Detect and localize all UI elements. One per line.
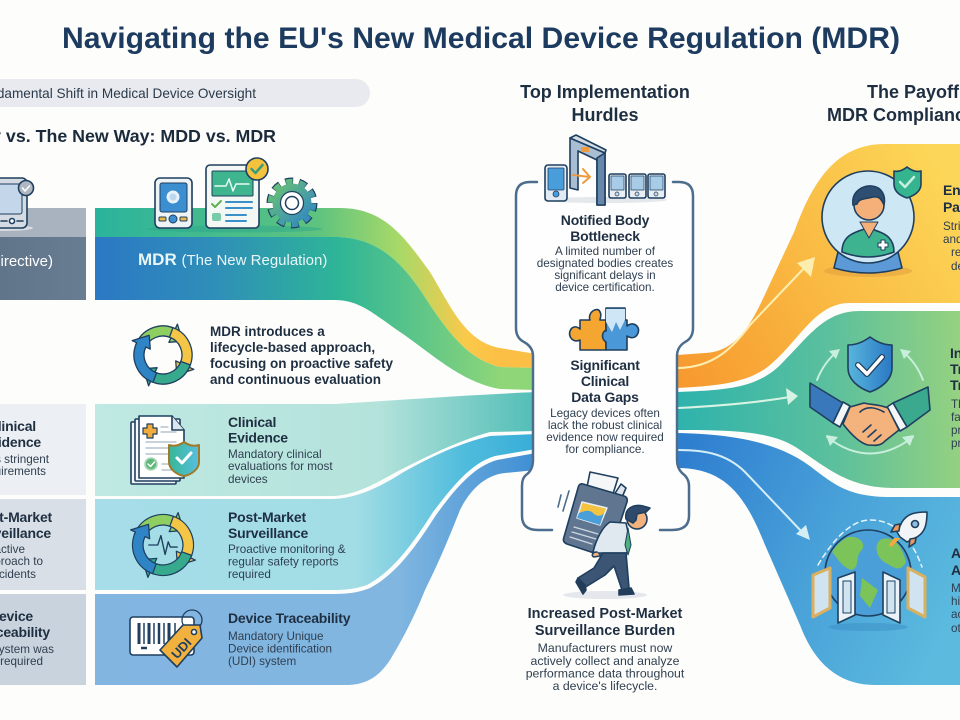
panel: MDR post-market bbox=[95, 434, 536, 590]
panel: MDR post-market: regular safety reports bbox=[228, 556, 339, 568]
icon: MDR gear bbox=[271, 182, 313, 224]
icon: MDR device bbox=[147, 178, 323, 232]
title: Navigating the EU's New Medical Device Regulation (MDR) bbox=[62, 22, 900, 55]
panel: MDR clinical evidence: Mandatory clinical bbox=[228, 448, 322, 461]
text: lifecycle approach bbox=[210, 324, 394, 387]
text: post-market burden: Manufacturers must now bbox=[538, 641, 672, 655]
text: notified body bottleneck: Bottleneck bbox=[570, 228, 640, 244]
section banner: fundamental shift bbox=[0, 79, 370, 107]
panel: MDD clinical evidence bbox=[0, 404, 86, 495]
panel: MDR traceability: Device identification bbox=[228, 642, 332, 656]
text: accelerated market access bbox=[951, 545, 960, 635]
panel: MDR clinical evidence: evaluations for most bbox=[228, 460, 333, 473]
heading: top implementation hurdles bbox=[520, 82, 690, 125]
panel: MDR traceability bbox=[95, 453, 536, 685]
text: post-market burden: a device's lifecycle. bbox=[553, 679, 657, 693]
panel: MDR traceability: Mandatory Unique bbox=[228, 630, 324, 643]
panel: MDR clinical evidence: devices bbox=[228, 473, 268, 486]
text: clinical data gaps: evidence now required bbox=[546, 431, 664, 444]
flow band: MDR header lower strip bbox=[95, 237, 536, 390]
panel: MDD post-market bbox=[0, 499, 86, 590]
panel: MDR clinical evidence: Evidence bbox=[228, 430, 288, 446]
text: clinical data gaps: Data Gaps bbox=[571, 389, 639, 405]
heading: top implementation hurdles: Top Implementation bbox=[520, 82, 690, 102]
text: notified body bottleneck: significant delays in bbox=[554, 269, 656, 282]
panel: MDD traceability: required bbox=[0, 655, 43, 668]
flow band: MDR upper strip to hurdles bbox=[95, 208, 536, 368]
flow band: blue to market access bbox=[677, 433, 960, 685]
text: lifecycle approach: MDR introduces a bbox=[210, 324, 325, 339]
arrow: to transparency bbox=[678, 388, 798, 408]
panel: MDR post-market: Post-Market bbox=[228, 509, 306, 525]
panel: hurdles card bbox=[516, 182, 693, 530]
text: clinical data gaps: Clinical bbox=[581, 373, 629, 389]
flow band: orange to patient safety bbox=[677, 144, 960, 388]
text: lifecycle approach: focusing on proactive safety bbox=[210, 356, 394, 371]
text: notified body bottleneck: A limited number of bbox=[555, 245, 656, 258]
panel: MDD header bbox=[0, 208, 86, 300]
panel: MDD traceability bbox=[0, 594, 86, 685]
icon: clinical document bbox=[131, 416, 199, 484]
flow band: green to transparency bbox=[677, 311, 960, 488]
heading: top implementation hurdles: Hurdles bbox=[571, 105, 639, 125]
text: clinical data gaps bbox=[546, 357, 664, 456]
panel: MDR traceability: (UDI) system bbox=[228, 655, 296, 668]
icon: patient in protective globe bbox=[822, 167, 921, 277]
text: increased transparency and trust bbox=[950, 345, 960, 450]
icon: notified body gate bbox=[543, 135, 667, 205]
text: notified body bottleneck: designated bodies creates bbox=[537, 257, 673, 270]
icon: UDI barcode tag: UDI bbox=[168, 635, 194, 662]
arrow: to patient safety bbox=[677, 257, 815, 368]
panel: MDR clinical evidence: Clinical bbox=[228, 414, 276, 430]
text: notified body bottleneck bbox=[537, 212, 673, 294]
heading: the payoff bbox=[827, 82, 960, 125]
text: post-market burden: Increased Post-Market bbox=[528, 606, 683, 622]
text: enhanced patient safety bbox=[943, 182, 960, 273]
panel: MDR post-market: required bbox=[228, 568, 271, 581]
text: lifecycle approach: and continuous evaluation bbox=[210, 372, 381, 387]
icon: old device bbox=[0, 178, 34, 231]
arrow: to market access bbox=[678, 450, 810, 540]
panel: MDR post-market: Surveillance bbox=[228, 525, 309, 541]
icon: shield and handshake bbox=[810, 337, 930, 454]
icon: globe with doors and rocket bbox=[813, 512, 927, 631]
icon: MDR report bbox=[206, 158, 268, 228]
text: post-market burden: Surveillance Burden bbox=[535, 623, 675, 639]
icon: UDI barcode tag bbox=[130, 610, 202, 667]
flow band: MDR header lower strip: MDR (The New Regulation) bbox=[138, 250, 327, 269]
text: clinical data gaps: for compliance. bbox=[565, 443, 645, 456]
text: notified body bottleneck: Notified Body bbox=[561, 212, 650, 228]
icon: person carrying backpack bbox=[558, 472, 650, 599]
text: clinical data gaps: Legacy devices often bbox=[550, 407, 660, 420]
panel: MDR clinical evidence bbox=[95, 392, 536, 496]
icon: monitoring cycle with pulse bbox=[131, 513, 195, 577]
icon: puzzle pieces bbox=[570, 308, 639, 350]
panel: MDR traceability: Device Traceability bbox=[228, 610, 351, 626]
text: lifecycle approach: lifecycle-based approach, bbox=[210, 340, 375, 355]
text: post-market burden: actively collect and analyze bbox=[530, 654, 680, 668]
panel: MDR post-market: Proactive monitoring & bbox=[228, 543, 346, 556]
text: clinical data gaps: Significant bbox=[570, 357, 640, 373]
icon: lifecycle arrows bbox=[132, 324, 194, 386]
text: clinical data gaps: lack the robust clinical bbox=[548, 419, 662, 432]
text: notified body bottleneck: device certification. bbox=[555, 281, 655, 294]
text: post-market burden bbox=[526, 606, 685, 693]
text: post-market burden: performance data throughout bbox=[526, 666, 685, 680]
